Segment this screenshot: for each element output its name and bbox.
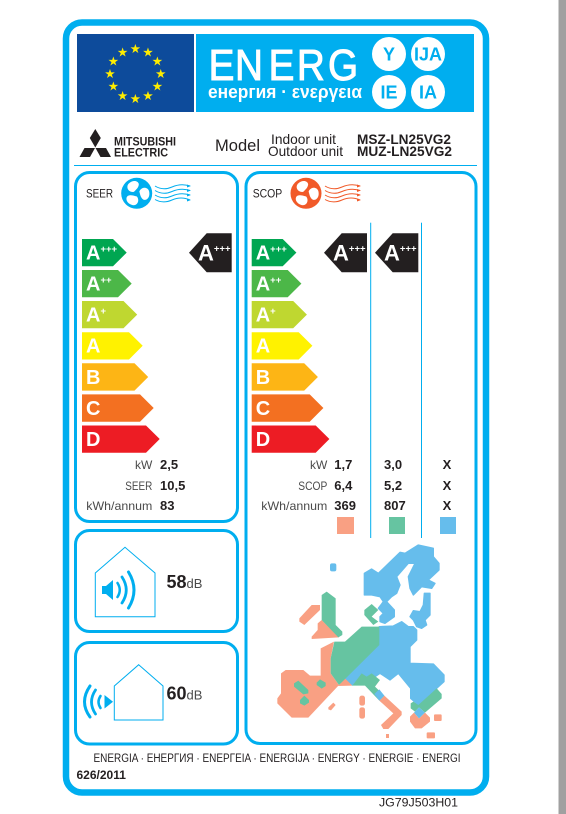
climate zone swatches	[337, 517, 456, 534]
rating arrow: A+++ column two: A	[384, 240, 400, 266]
outdoor noise value: 60dB	[166, 684, 202, 704]
model information: MSZ-LN25VG2	[357, 132, 451, 147]
SCOP data rows: kW	[310, 458, 328, 472]
model information: Indoor unit	[271, 131, 336, 147]
brand logo: ELECTRIC	[114, 148, 168, 160]
EU flag: ★	[130, 42, 141, 56]
panel: outdoor noise	[76, 642, 238, 744]
energy class scale	[82, 239, 160, 453]
energy class scale: A	[86, 336, 100, 358]
language circles: IA	[419, 82, 437, 102]
map of Europe climate zones	[277, 545, 444, 738]
panel: SCOP heating: 807	[384, 498, 406, 513]
rating arrow: A+++	[189, 233, 232, 272]
EU flag: ★	[152, 79, 163, 93]
rating arrow: A+++ column one: A	[333, 240, 349, 266]
panel: SCOP heating: 1,7	[334, 457, 352, 472]
SEER data rows: kWh/annum	[86, 499, 152, 513]
rating arrow: A+++ column one	[324, 233, 367, 272]
energy class scale: A	[86, 242, 100, 264]
energy class scale: ++	[270, 275, 282, 286]
panel: SCOP heating	[246, 172, 476, 744]
EU flag: ★	[152, 54, 163, 68]
panel: SCOP heating: 6,4	[334, 478, 353, 493]
indoor noise value: 58dB	[166, 572, 202, 592]
EU flag: ★	[108, 54, 119, 68]
page edge strip	[558, 0, 566, 814]
energy class scale: B	[86, 367, 100, 389]
outer label frame	[66, 22, 486, 792]
EU flag: ★	[142, 89, 154, 103]
multilingual energy footer: ENERGIA · ЕНЕРГИЯ · ΕΝΕΡΓΕΙΑ · ENERGIJA · ENERGY · ENERGIE · ENERGI	[94, 753, 460, 765]
EU flag: ★	[155, 67, 166, 81]
panel: SEER cooling: 83	[160, 498, 174, 513]
panel: SEER cooling	[76, 172, 238, 522]
language circles: IE	[380, 82, 398, 102]
energy class scale: +++	[270, 244, 287, 255]
SCOP data rows: SCOP	[298, 479, 327, 493]
rating arrow: A+++ column one: +++	[349, 244, 366, 254]
SCOP data rows	[261, 458, 328, 513]
rating arrow: A+++: +++	[214, 244, 231, 254]
icon: house with speaker outside	[84, 665, 163, 720]
EU flag: ★	[117, 45, 128, 59]
energy class scale: A	[86, 274, 100, 296]
SEER data rows: kW	[135, 458, 153, 472]
model information: Model	[215, 136, 260, 155]
energy class scale: B	[256, 367, 270, 389]
model information: MUZ-LN25VG2	[357, 144, 452, 159]
energy class scale: +	[270, 306, 276, 317]
energy class scale	[252, 239, 329, 453]
SEER heading: SEER	[86, 188, 113, 200]
panel: SCOP heating: 5,2	[384, 478, 402, 493]
EU flag: ★	[130, 92, 141, 106]
rating arrow: A+++ column two: +++	[400, 244, 417, 254]
energy class scale: A	[256, 304, 270, 326]
energy class scale: C	[86, 398, 100, 420]
icon: cooling fan	[117, 176, 191, 214]
energy class scale: A	[256, 336, 270, 358]
EU flag	[77, 34, 194, 112]
language circles	[372, 37, 445, 109]
EU flag: ★	[108, 79, 119, 93]
model information: Outdoor unit	[268, 143, 343, 159]
banner title: ENERG	[209, 40, 358, 90]
part code: JG79J503H01	[379, 798, 458, 810]
icon: house with speaker inside	[95, 547, 155, 617]
regulation number: 626/2011	[76, 768, 126, 782]
model information	[215, 131, 452, 159]
SCOP data rows: kWh/annum	[261, 499, 327, 513]
energy class scale: D	[256, 429, 270, 451]
language circles: IJA	[414, 44, 442, 64]
panel: SCOP heating: X	[443, 478, 452, 493]
banner subtitle: енергия · ενεργεια	[208, 82, 362, 102]
energy class scale: D	[86, 429, 100, 451]
EU flag: ★	[142, 45, 154, 59]
SCOP heading: SCOP	[253, 188, 282, 200]
energy class scale: +++	[100, 244, 118, 255]
language circles: Y	[383, 44, 395, 64]
SEER data rows: SEER	[125, 479, 153, 493]
energy class scale: A	[86, 304, 100, 326]
icon: three diamonds	[80, 129, 111, 157]
energy class scale: A	[256, 274, 270, 296]
energy class scale: +	[100, 306, 106, 317]
panel: SCOP heating: 3,0	[384, 457, 402, 472]
rating arrow: A+++: A	[198, 240, 214, 266]
energy class scale: A	[256, 242, 270, 264]
panel: SEER cooling: 10,5	[160, 478, 185, 493]
panel: SEER cooling: 2,5	[160, 457, 178, 472]
energy banner	[196, 34, 474, 112]
SEER data rows	[86, 458, 153, 513]
panel: SCOP heating: 369	[334, 498, 356, 513]
brand logo: MITSUBISHI	[114, 136, 176, 148]
rating arrow: A+++ column two	[375, 233, 418, 272]
EU flag: ★	[104, 67, 116, 81]
panel: SCOP heating: X	[443, 498, 452, 513]
brand logo	[80, 129, 176, 160]
panel: SCOP heating: X	[443, 457, 452, 472]
energy class scale: ++	[100, 275, 112, 286]
panel: indoor noise	[76, 530, 238, 632]
icon: heating fan	[286, 176, 361, 214]
energy class scale: C	[256, 398, 270, 420]
EU flag: ★	[117, 89, 128, 103]
